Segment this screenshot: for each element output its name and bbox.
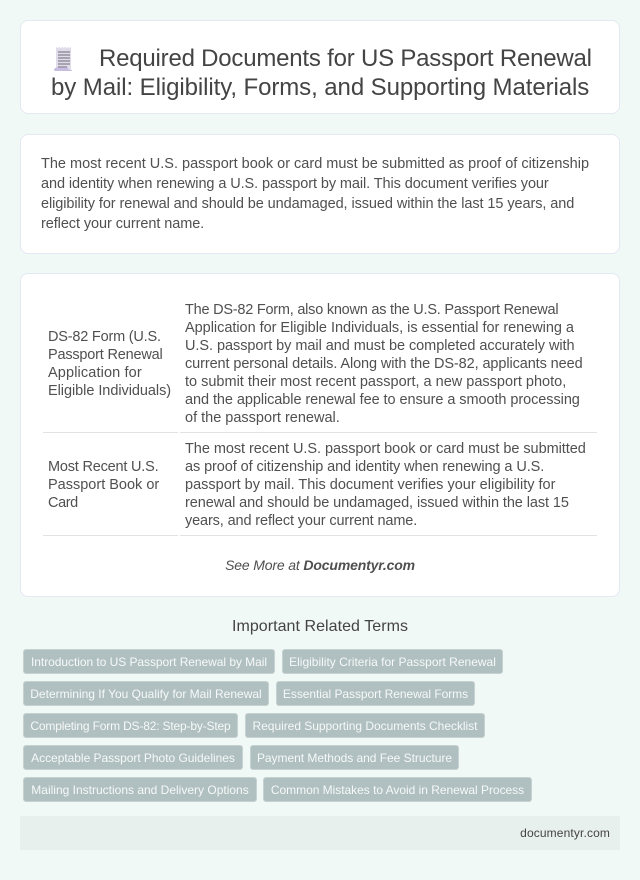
row label: passport book: Card [48, 495, 78, 511]
row text: DS-82: U.S. passport by mail and must be completed accurately with [185, 338, 575, 354]
row text: passport book: years, and reflect your current name. [185, 513, 417, 529]
tag [23, 713, 238, 738]
row label: DS-82: Passport Renewal [48, 347, 162, 363]
tag: Determining If You Qualify for Mail Renewal [30, 687, 262, 701]
row label: passport book: Passport Book or [48, 477, 159, 493]
footer text: documentyr.com [520, 826, 610, 840]
tag: Introduction to US Passport Renewal by Mail [31, 655, 267, 669]
row text: DS-82: to submit their most recent passport, a new passport photo, [185, 374, 566, 390]
tag [276, 681, 475, 706]
row label: passport book [48, 459, 159, 511]
tag [263, 777, 532, 802]
tag: Acceptable Passport Photo Guidelines [31, 751, 235, 765]
tag [23, 649, 275, 674]
tag [250, 745, 459, 770]
tag: Eligibility Criteria for Passport Renewal [289, 655, 496, 669]
heading: related terms: Important Related Terms [232, 618, 408, 635]
tag [23, 777, 257, 802]
row label: DS-82: DS-82 Form (U.S. [48, 329, 161, 345]
title: by Mail: Eligibility, Forms, and Supporting Materials [51, 74, 589, 101]
row text: DS-82 [185, 302, 583, 426]
tag: Completing Form DS-82: Step-by-Step [30, 719, 231, 733]
tag: Common Mistakes to Avoid in Renewal Process [271, 783, 524, 797]
intro text: eligibility for renewal and should be undamaged, issued within the last 15 years, and [41, 196, 574, 212]
row label: DS-82 [48, 329, 171, 399]
row label: DS-82: Application for [48, 365, 142, 381]
tag [23, 745, 243, 770]
panel: title card [20, 20, 620, 114]
row text: passport book: renewal and should be undamaged, issued within the last 15 [185, 495, 569, 511]
title [51, 45, 592, 101]
row label: DS-82: Eligible Individuals) [48, 383, 171, 399]
tag [23, 681, 269, 706]
row text: passport book: as proof of citizenship and identity when renewing a U.S. [185, 459, 544, 475]
panel: documents table [20, 273, 620, 597]
row text: DS-82: current personal details. Along with the DS-82, applicants need [185, 356, 583, 372]
tag [245, 713, 485, 738]
row text: passport book [185, 441, 586, 529]
icon: document receipt [54, 47, 72, 71]
intro text: The most recent U.S. passport book or card must be submitted as proof of citizenship [41, 156, 589, 172]
intro text: and identity when renewing a U.S. passport by mail. This document verifies your [41, 176, 549, 192]
panel: introduction [20, 134, 620, 254]
row label: passport book: Most Recent U.S. [48, 459, 158, 475]
footer bar [20, 816, 620, 850]
tag: Essential Passport Renewal Forms [283, 687, 468, 701]
tag: Required Supporting Documents Checklist [253, 719, 477, 733]
tag: Mailing Instructions and Delivery Options [31, 783, 249, 797]
intro text [41, 156, 589, 232]
row text: DS-82: Application for Eligible Individuals, is essential for renewing a [185, 320, 574, 336]
tag [282, 649, 503, 674]
row text: DS-82: The DS-82 Form, also known as the U.S. Passport Renewal [185, 302, 558, 318]
row text: DS-82: and the applicable renewal fee to ensure a smooth processing [185, 392, 580, 408]
row text: DS-82: of the passport renewal. [185, 410, 340, 426]
tag: Payment Methods and Fee Structure [257, 751, 452, 765]
see more link: See More at Documentyr.com [225, 557, 415, 573]
intro text: reflect your current name. [41, 216, 204, 232]
row text: passport book: passport by mail. This document verifies your eligibility for [185, 477, 555, 493]
title: Required Documents for US Passport Renewal [99, 45, 592, 72]
row text: passport book: The most recent U.S. passport book or card must be submitted [185, 441, 586, 457]
